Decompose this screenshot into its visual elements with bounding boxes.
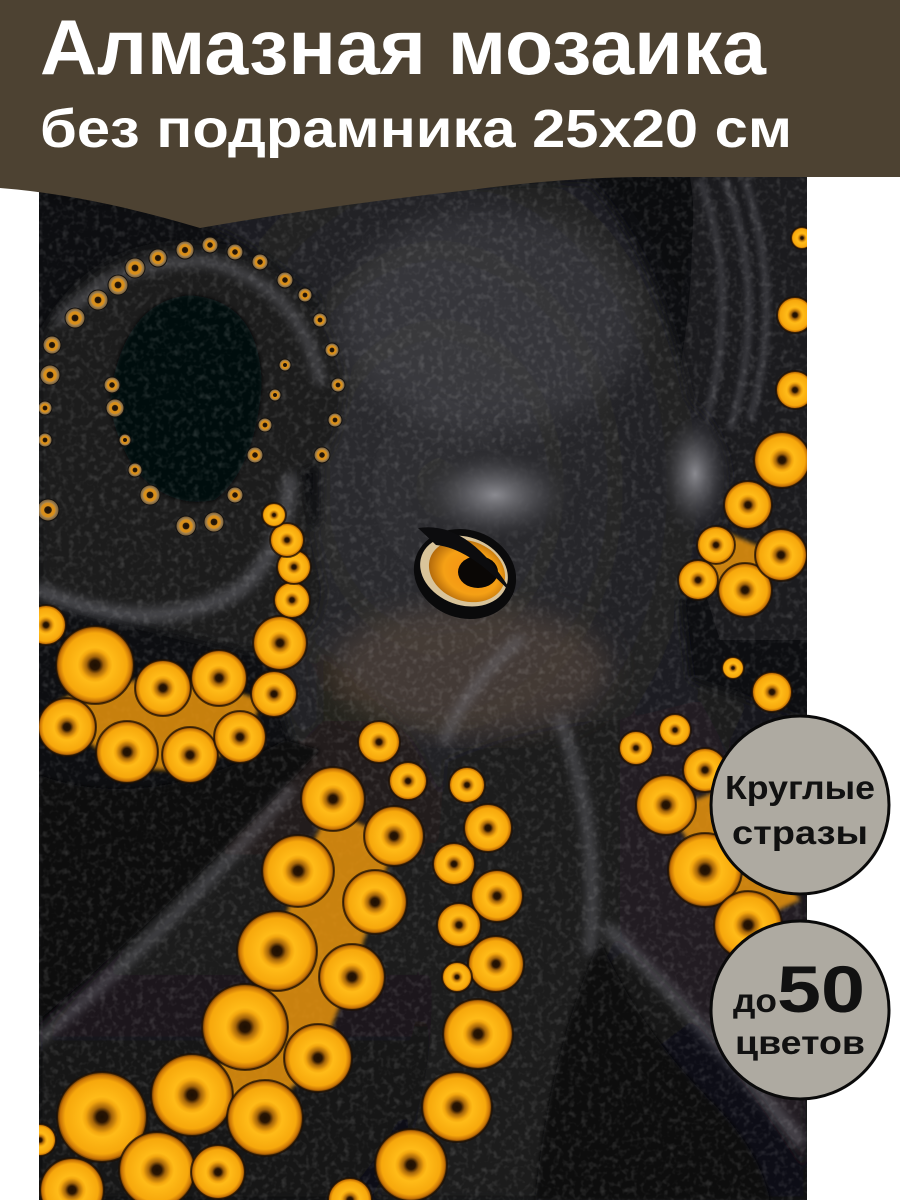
mantle lighter patch xyxy=(340,210,640,430)
eye xyxy=(414,527,516,619)
badge: round rhinestones: стразы xyxy=(732,814,868,851)
subtitle: без подрамника 25х20 см xyxy=(40,99,792,159)
badge: up to 50 colours: до xyxy=(733,982,777,1019)
left dark background xyxy=(63,740,320,1000)
lower centre gap xyxy=(535,940,770,1200)
banner xyxy=(0,0,900,228)
badge: up to 50 colours: цветов xyxy=(735,1024,865,1061)
skin texture xyxy=(39,175,807,1200)
badge: up to 50 colours: 50 xyxy=(777,952,865,1026)
brow bulges xyxy=(420,423,725,536)
orange flesh under suckers xyxy=(60,530,800,1118)
suckers: large orange xyxy=(24,227,814,1200)
title: Алмазная мозаика xyxy=(40,3,767,91)
left lower arm xyxy=(39,650,440,1200)
picture background xyxy=(39,175,807,1200)
upper left arm loop xyxy=(39,245,345,651)
badge: round rhinestones: Круглые xyxy=(725,769,875,806)
badge: up to 50 colours xyxy=(711,921,889,1099)
badge: round rhinestones xyxy=(711,716,889,894)
loop opening xyxy=(110,295,262,502)
snout brown patch xyxy=(330,605,610,735)
head xyxy=(39,182,807,1200)
upper right curled tentacle xyxy=(682,177,807,640)
ridge highlights xyxy=(39,261,800,1140)
upper right background patch xyxy=(690,182,694,236)
centre arm xyxy=(374,726,580,1196)
picture: octopus xyxy=(24,175,814,1200)
right arm xyxy=(620,751,806,1164)
suckers: small on curled arm xyxy=(37,237,345,536)
body and arms xyxy=(39,182,807,1200)
